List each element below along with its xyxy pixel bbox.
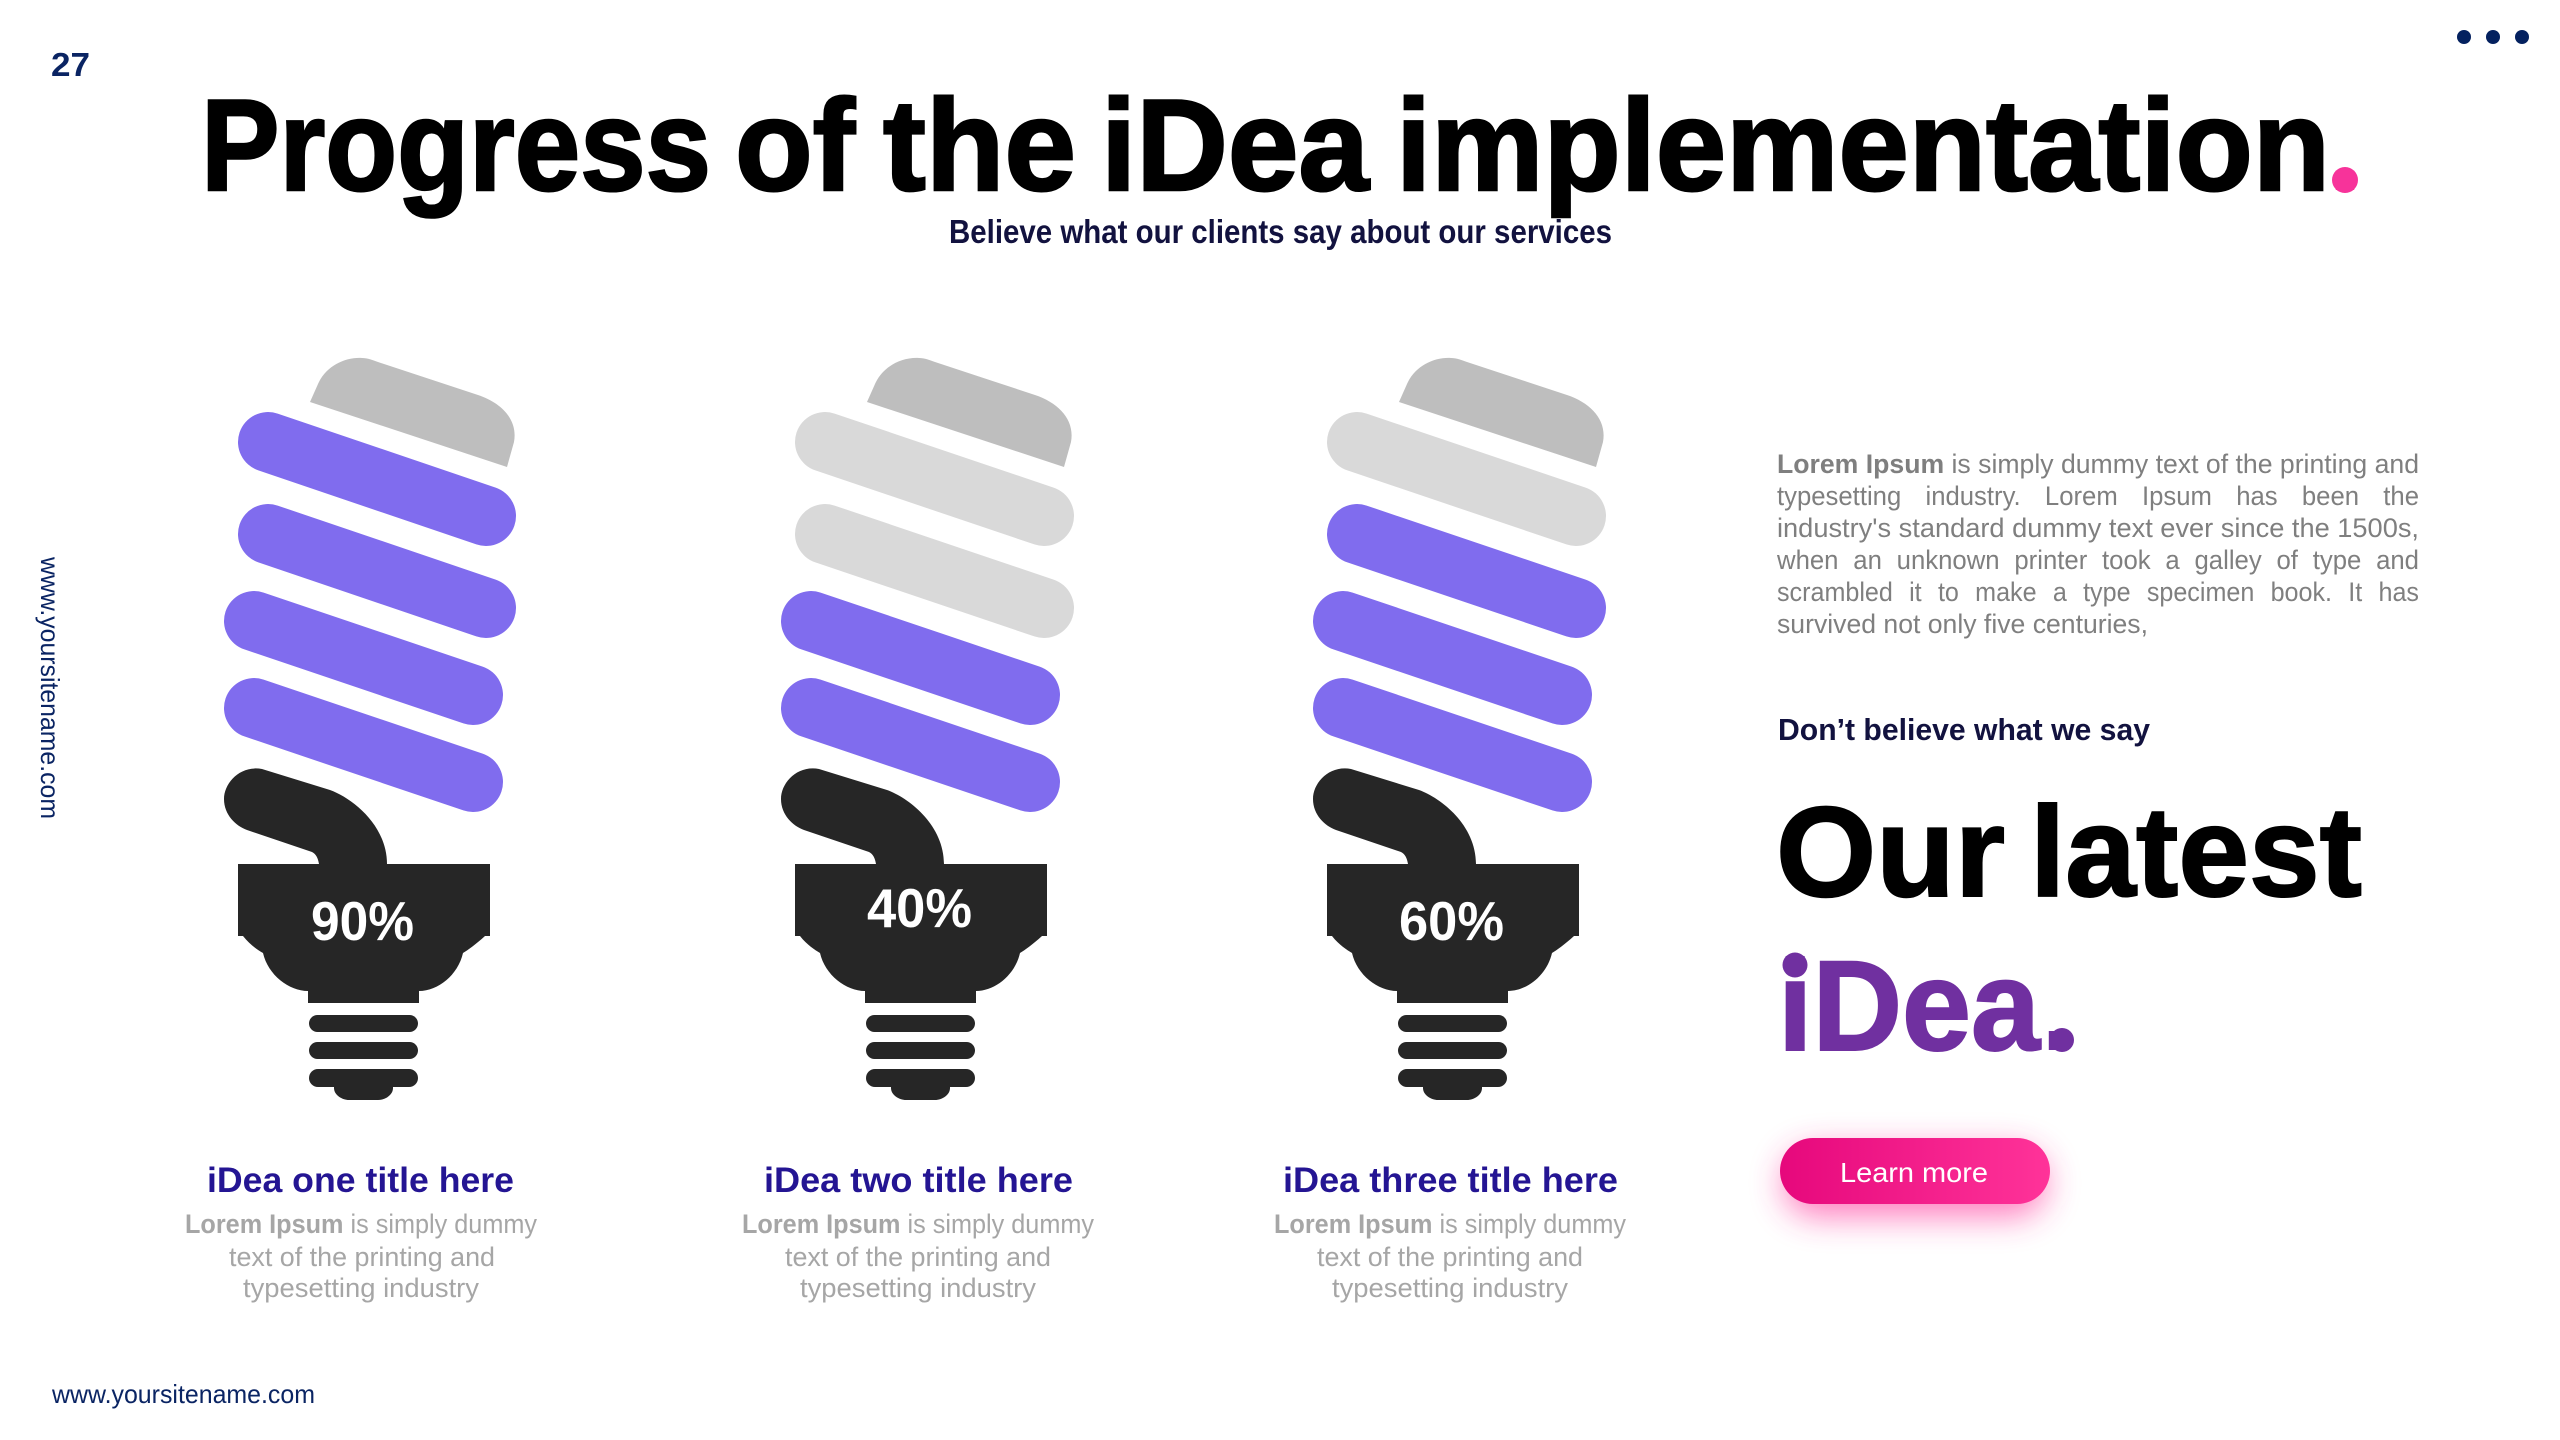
bulb three: 60% (1313, 358, 1604, 1100)
body paragraph: Lorem Ipsum is simply dummy text of the printing and (1777, 449, 2419, 479)
caption two: iDea two title here (764, 1161, 1073, 1200)
menu dots icon (2457, 30, 2529, 44)
caption two (742, 1161, 1094, 1303)
title: the (883, 72, 1076, 218)
caption one: text of the printing and (229, 1242, 495, 1272)
headline (1776, 781, 2362, 924)
percentage 90: 90% (311, 890, 414, 952)
caption two: typesetting industry (800, 1273, 1037, 1303)
title: of (735, 72, 856, 218)
caption two: text of the printing and (785, 1242, 1051, 1272)
caption one: iDea one title here (207, 1161, 514, 1200)
learn more button: Learn more (1840, 1157, 1988, 1188)
body paragraph: typesetting industry. Lorem Ipsum has been the (1777, 481, 2419, 511)
tagline: Don’t believe what we say (1778, 712, 2151, 747)
caption two: Lorem Ipsum is simply dummy (742, 1209, 1094, 1239)
title: implementation (1396, 72, 2330, 218)
bulb one: 90% (224, 358, 515, 1100)
percentage 40: 40% (867, 877, 972, 939)
percentage 60: 60% (1399, 890, 1504, 952)
page number: 27 (51, 46, 90, 83)
side url: www.yoursitename.com (35, 556, 65, 819)
caption three: text of the printing and (1317, 1242, 1583, 1272)
body paragraph: scrambled it to make a type specimen book. It has (1777, 577, 2419, 607)
footer url: www.yoursitename.com (51, 1379, 315, 1409)
headline: Our (1776, 781, 2005, 924)
title: . (2327, 72, 2363, 218)
body paragraph: survived not only five centuries, (1777, 609, 2148, 639)
caption three: iDea three title here (1283, 1161, 1618, 1200)
caption one: typesetting industry (243, 1273, 480, 1303)
body paragraph (1776, 449, 2419, 639)
body paragraph: when an unknown printer took a galley of type and (1776, 545, 2419, 575)
caption one (185, 1161, 537, 1303)
title (201, 72, 2363, 218)
caption three: typesetting industry (1332, 1273, 1569, 1303)
caption three (1274, 1161, 1626, 1303)
learn more button (1780, 1138, 2050, 1216)
caption three: Lorem Ipsum is simply dummy (1274, 1209, 1626, 1239)
headline accent: . (2040, 935, 2076, 1078)
subtitle: Believe what our clients say about our services (949, 213, 1612, 250)
headline: latest (2030, 781, 2362, 924)
headline accent: iDea (1778, 935, 2041, 1078)
title: iDea (1101, 72, 1371, 218)
caption one: Lorem Ipsum is simply dummy (185, 1209, 537, 1239)
body paragraph: industry's standard dummy text ever since the 1500s, (1777, 513, 2419, 543)
bulb two: 40% (781, 358, 1072, 1100)
title: Progress (201, 72, 711, 218)
